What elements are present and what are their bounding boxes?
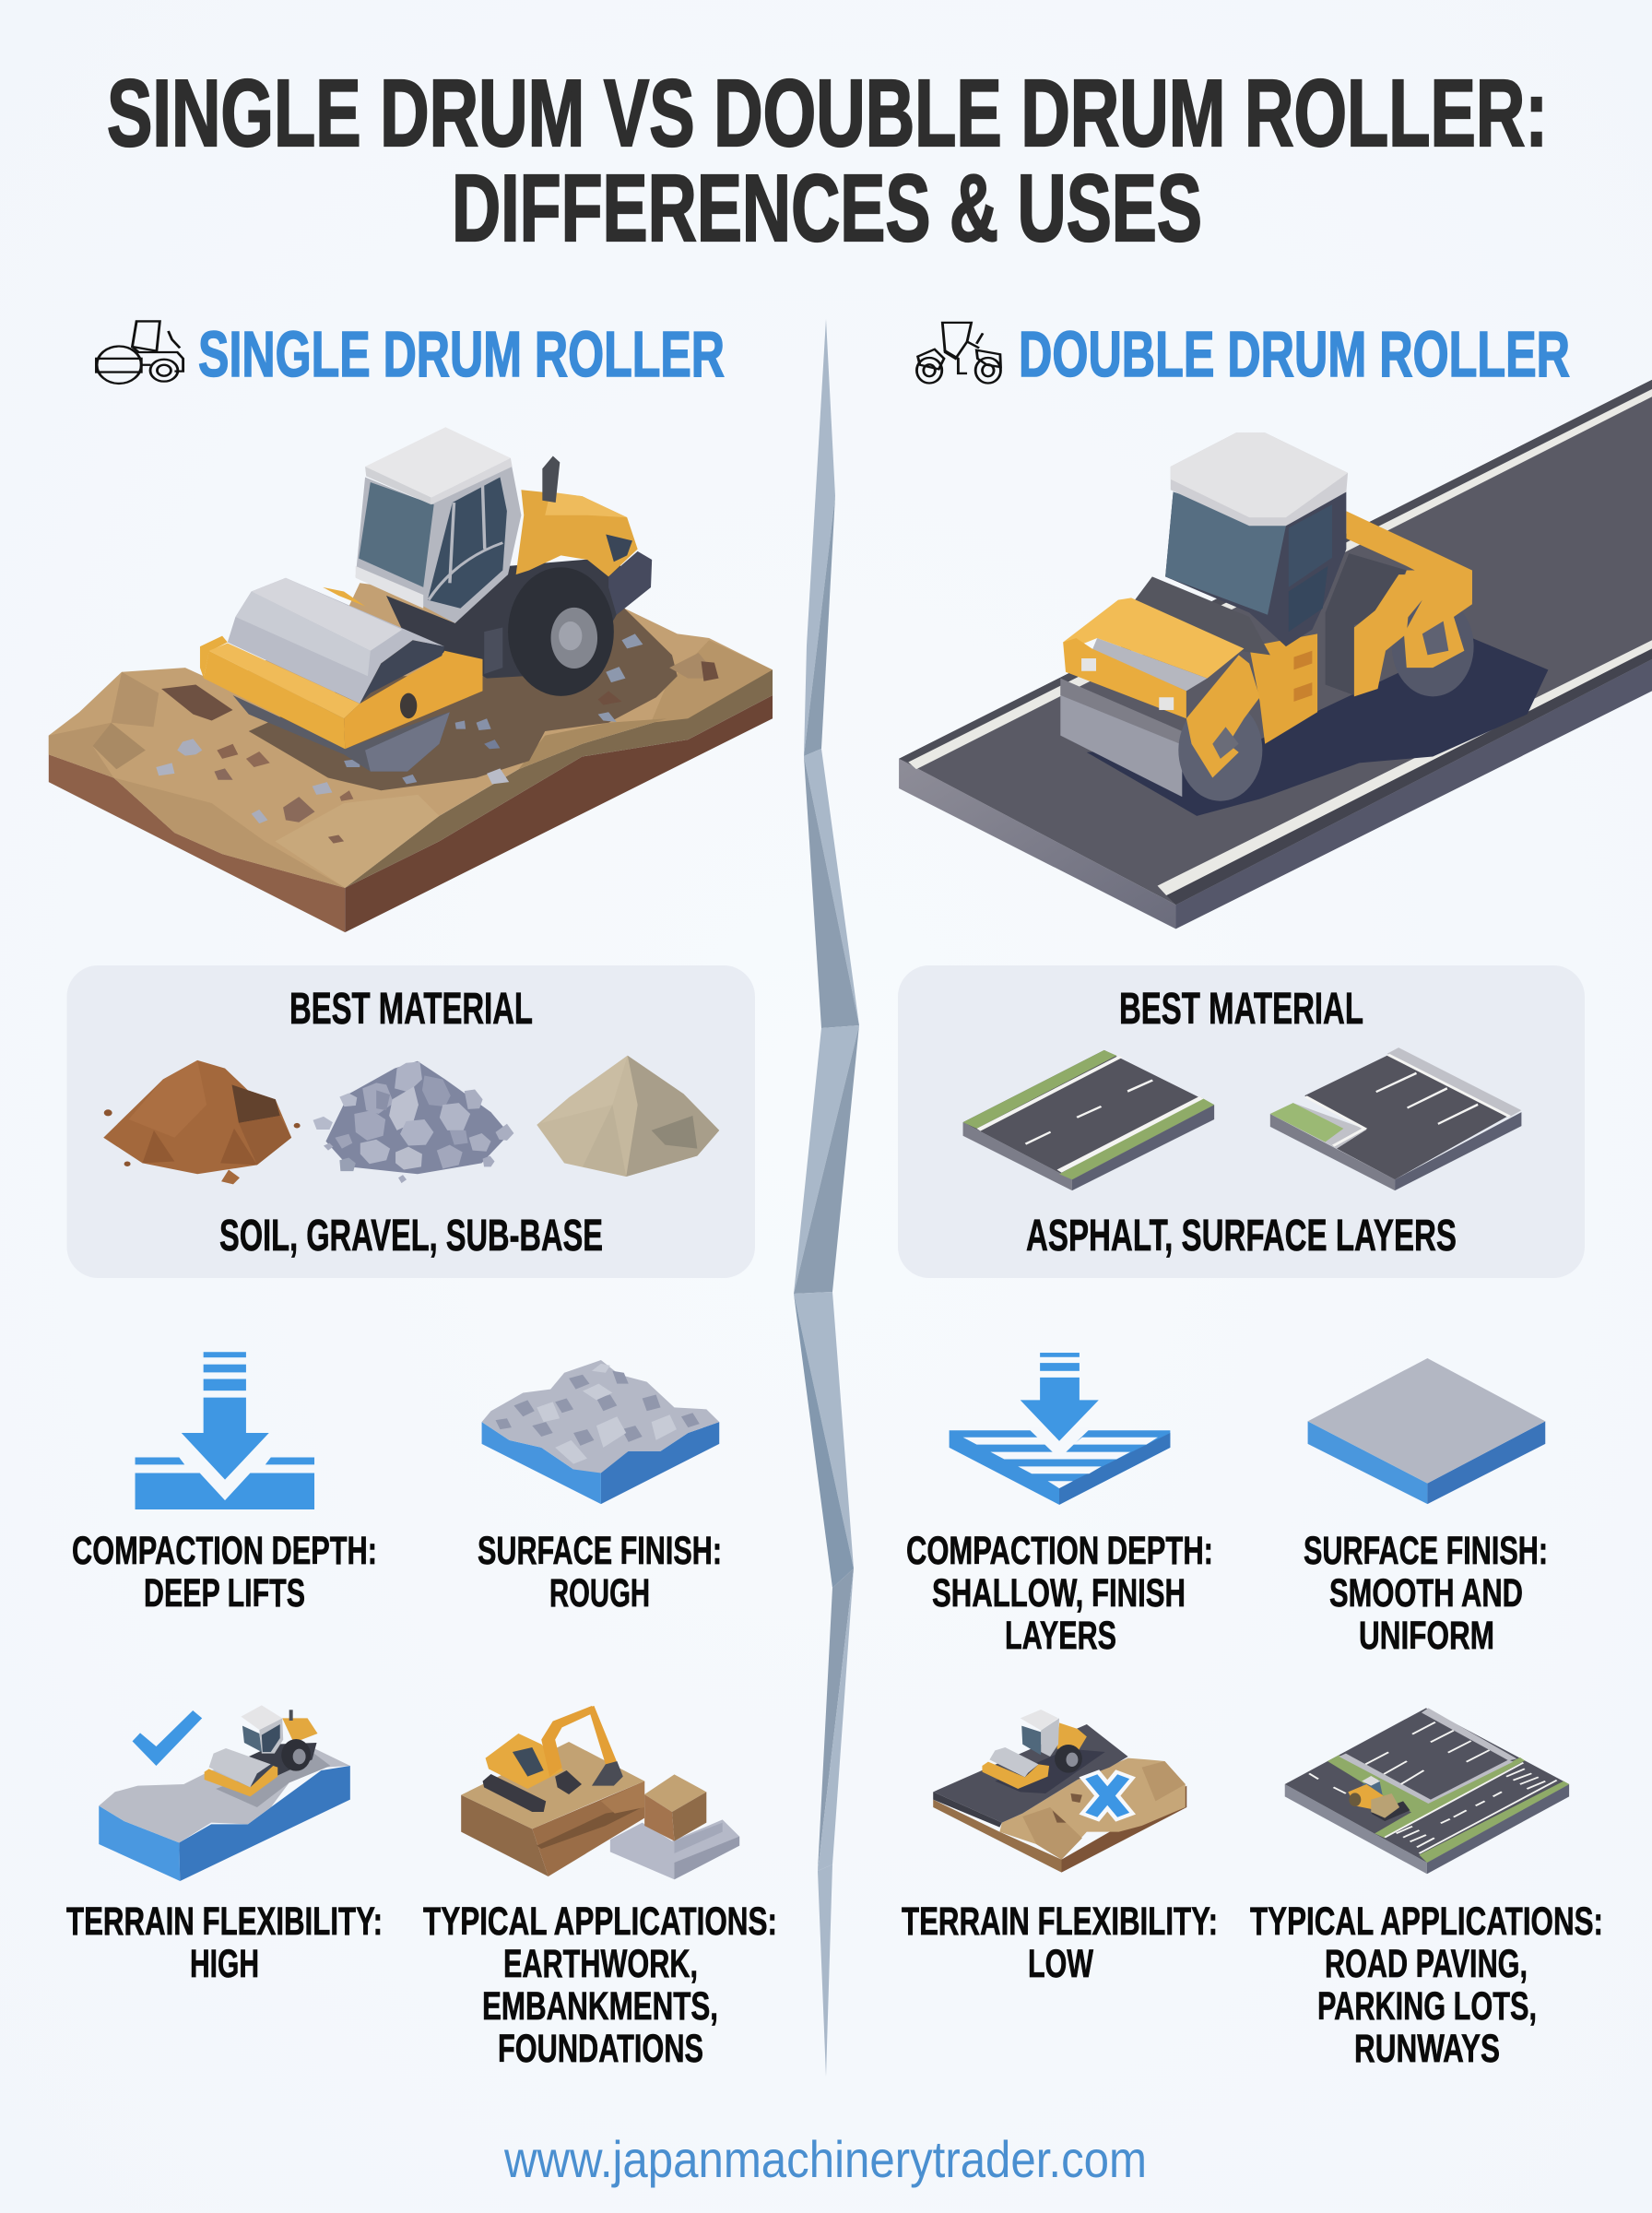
feature: terrain flexibility low <box>902 1710 1218 1986</box>
label: SURFACE FINISH: <box>1304 1529 1548 1573</box>
feature: compaction depth shallow <box>906 1353 1213 1658</box>
cab <box>356 427 521 623</box>
sand pile <box>537 1056 719 1177</box>
mini double roller <box>1348 1776 1410 1821</box>
label: UNIFORM <box>1359 1614 1494 1658</box>
gravel pile <box>313 1061 513 1183</box>
icon: rough surface <box>482 1360 719 1504</box>
label: RUNWAYS <box>1354 2027 1500 2071</box>
label: SMOOTH AND <box>1329 1571 1523 1615</box>
label: PARKING LOTS, <box>1317 1984 1537 2029</box>
label <box>906 1529 1213 1658</box>
panel: double drum roller column <box>898 318 1652 2071</box>
panel: best material single <box>66 965 755 1278</box>
label: DEEP LIFTS <box>144 1571 305 1615</box>
heading: single drum roller: SINGLE DRUM ROLLER <box>198 318 725 390</box>
feature: typical applications double <box>1250 1708 1603 2071</box>
mini roller <box>205 1705 318 1796</box>
icon: roller on uneven blue block with check <box>99 1705 350 1881</box>
chassis <box>386 558 651 679</box>
rocks <box>156 633 720 844</box>
footer url: www.japanmachinerytrader.com <box>503 2130 1147 2188</box>
check mark <box>133 1710 202 1766</box>
label: TERRAIN FLEXIBILITY: <box>66 1899 383 1944</box>
icon: deep compaction arrow <box>136 1352 314 1509</box>
panel heading: BEST MATERIAL <box>1119 985 1363 1034</box>
label: SURFACE FINISH: <box>478 1529 722 1573</box>
engine hood <box>516 456 652 615</box>
feature: terrain flexibility high <box>66 1705 383 1986</box>
road tile <box>963 1050 1214 1190</box>
steel drum <box>228 578 450 772</box>
icon: shallow compaction arrow <box>950 1353 1170 1505</box>
cast shadow <box>1087 638 1548 816</box>
title <box>107 60 1548 261</box>
icon: roller on asphalt and soil with cross <box>933 1710 1186 1873</box>
panel: best material double <box>898 965 1585 1278</box>
compacted soil patch <box>249 609 678 790</box>
icon: single drum roller outline <box>96 321 183 384</box>
feature: surface finish smooth <box>1304 1358 1548 1658</box>
rear drum <box>1326 511 1474 696</box>
material caption: SOIL, GRAVEL, SUB-BASE <box>219 1212 603 1260</box>
material tiles <box>963 1047 1521 1190</box>
cab <box>1165 432 1348 646</box>
illustration: double drum roller on asphalt <box>899 380 1652 929</box>
label <box>1304 1529 1548 1658</box>
label: LAYERS <box>1005 1614 1116 1658</box>
label <box>478 1529 722 1615</box>
cross mark <box>1089 1773 1126 1818</box>
label: COMPACTION DEPTH: <box>906 1529 1213 1573</box>
label <box>902 1899 1218 1986</box>
panel: single drum roller column <box>49 318 777 2071</box>
panel heading: BEST MATERIAL <box>289 985 533 1034</box>
center divider <box>794 319 859 2077</box>
label: TERRAIN FLEXIBILITY: <box>902 1899 1218 1944</box>
label: ROUGH <box>549 1571 650 1615</box>
parking tile <box>1270 1047 1521 1190</box>
feature: surface finish rough <box>478 1360 722 1615</box>
icon: road, parking lot and runway <box>1285 1708 1569 1874</box>
label <box>72 1529 377 1615</box>
label: HIGH <box>190 1942 259 1986</box>
heading: single drum roller <box>96 318 725 390</box>
icon: smooth surface <box>1308 1358 1545 1504</box>
label <box>423 1899 777 2071</box>
feature: typical applications single <box>423 1706 777 2071</box>
label <box>1250 1899 1603 2071</box>
front drum and frame <box>1060 598 1262 801</box>
label: LOW <box>1028 1942 1093 1986</box>
feature: compaction depth deep <box>72 1352 377 1615</box>
label: FOUNDATIONS <box>498 2027 703 2071</box>
icon: excavator on earthwork with foundation <box>461 1706 739 1879</box>
title: DIFFERENCES & USES <box>452 155 1202 261</box>
material piles <box>103 1056 719 1184</box>
label: TYPICAL APPLICATIONS: <box>423 1899 777 1944</box>
excavator <box>483 1706 623 1812</box>
label: ROAD PAVING, <box>1325 1942 1528 1986</box>
body <box>1128 576 1317 744</box>
label: COMPACTION DEPTH: <box>72 1529 377 1573</box>
label: EARTHWORK, <box>503 1942 698 1986</box>
label <box>66 1899 383 1986</box>
road slab <box>899 380 1652 929</box>
mini roller <box>982 1710 1087 1789</box>
label: SHALLOW, FINISH <box>932 1571 1186 1615</box>
yellow drum frame <box>200 587 482 749</box>
rear wheel <box>484 567 614 696</box>
terrain block <box>49 583 773 932</box>
material caption: ASPHALT, SURFACE LAYERS <box>1026 1212 1457 1260</box>
icon: double drum roller outline <box>916 323 1000 384</box>
illustration: single drum roller on soil <box>49 427 773 932</box>
label: EMBANKMENTS, <box>482 1984 718 2029</box>
soil pile <box>103 1060 301 1184</box>
